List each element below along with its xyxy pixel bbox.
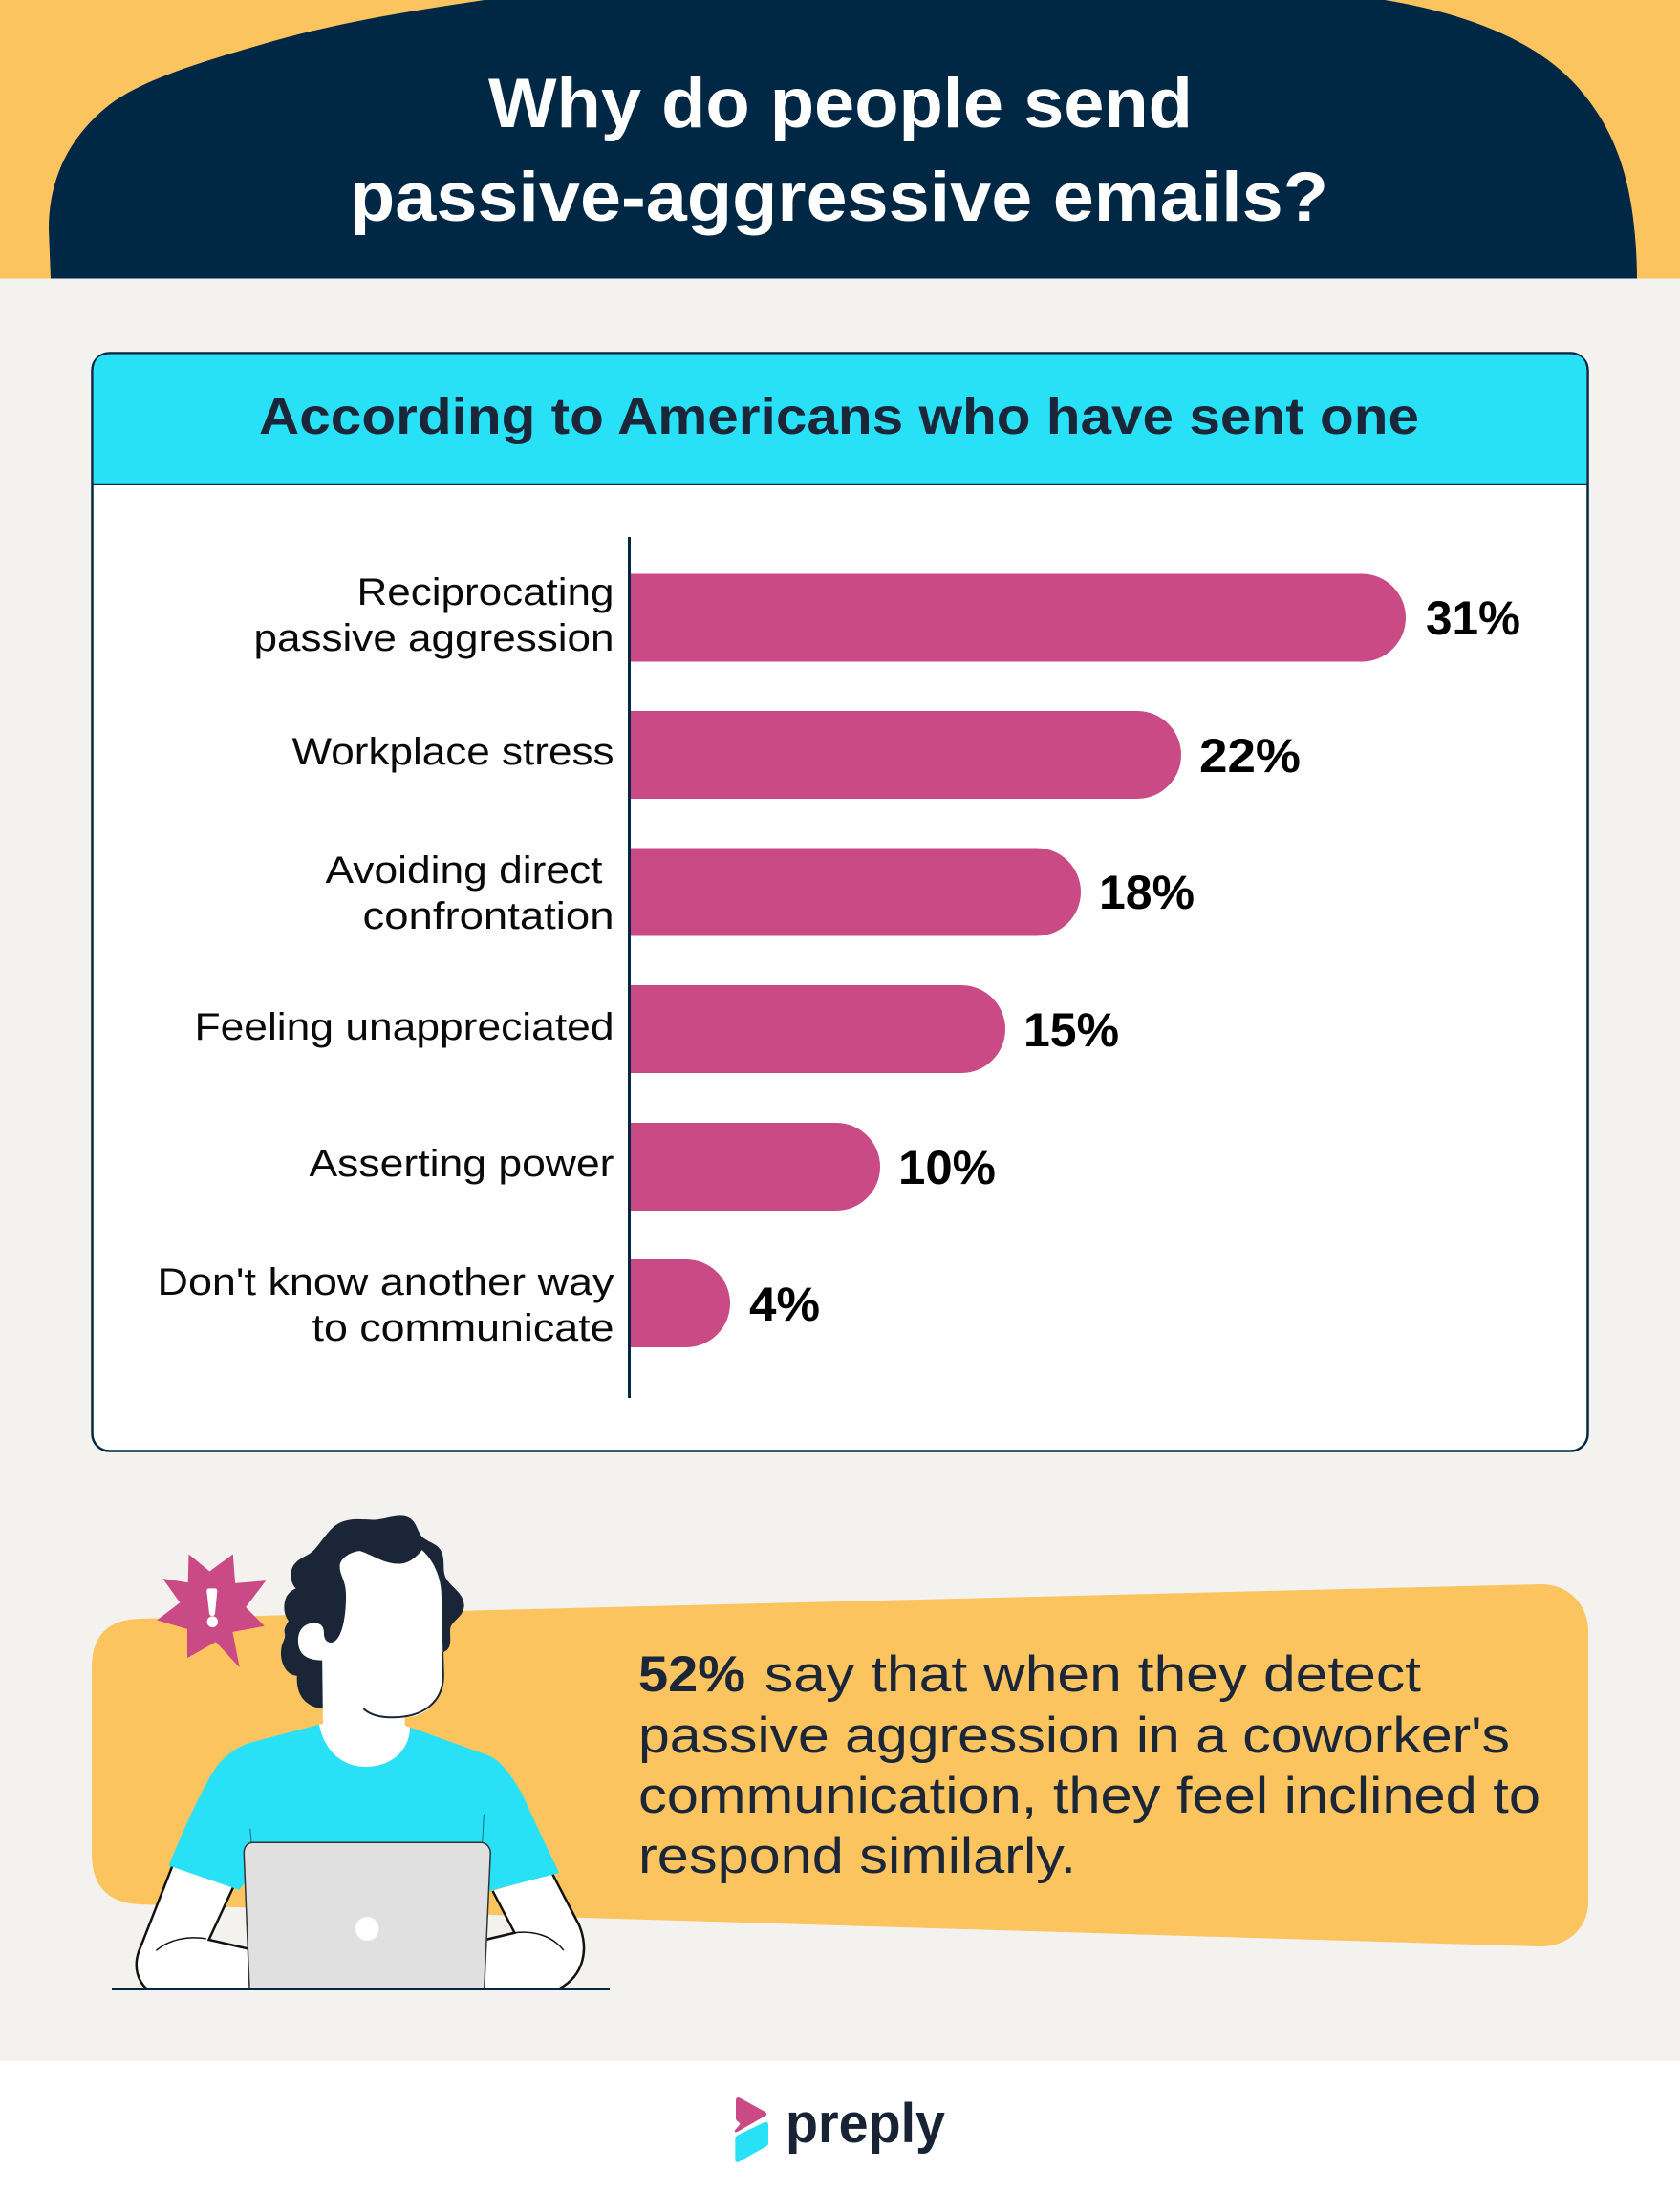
chart axis [628,537,631,1398]
bar: reciprocating passive aggression 31%: passive aggression [254,617,614,659]
shirt fold lines [250,1815,484,1842]
logo mark [735,2097,768,2162]
icon: alert burst [157,1555,266,1667]
bar: don't know another way to communicate 4%: Don't know another way [157,1261,614,1303]
panel: survey chart card [92,354,1588,1451]
person t-shirt [168,1725,559,1891]
card header divider [92,484,1588,485]
bar: avoiding direct confrontation 18% [325,849,1195,937]
bar: asserting power 10%: Asserting power [310,1143,614,1185]
footer white band [0,2061,1680,2192]
bar: feeling unappreciated 15%: 15% [1023,1003,1119,1057]
bar: avoiding direct confrontation 18%: Avoiding direct [325,849,602,892]
callout text: 52% [638,1646,745,1703]
logo wordmark: preply [786,2093,945,2155]
preply logo [735,2093,945,2162]
footer [0,2061,1680,2192]
illustration: person at laptop [137,1515,584,1988]
title [350,65,1328,236]
bar: feeling unappreciated 15%: Feeling unappreciated [195,1006,614,1048]
bar: workplace stress 22%: Workplace stress [292,731,614,773]
person left arm [137,1866,249,1988]
header yellow background [0,0,1680,279]
bar: workplace stress 22% [292,711,1301,799]
card header band [94,355,1586,484]
callout panel [92,1584,1588,1946]
bar: asserting power 10% [310,1123,996,1211]
bar: workplace stress 22%: 22% [1199,729,1301,783]
person hair [281,1515,464,1708]
bar: reciprocating passive aggression 31%: 31% [1426,591,1520,645]
bar: reciprocating passive aggression 31%: Reciprocating [357,571,614,613]
bar: asserting power 10%: 10% [898,1141,996,1194]
bar: feeling unappreciated 15% [195,985,1119,1073]
bar: don't know another way to communicate 4%: 4% [749,1278,820,1331]
callout text: communication, they feel inclined to [638,1768,1540,1824]
header banner [0,0,1680,279]
desk line [112,1988,610,1990]
bar: don't know another way to communicate 4% [157,1259,820,1349]
jaw line [363,1652,443,1717]
laptop [244,1842,490,1988]
card heading: According to Americans who have sent one [259,388,1419,445]
callout text: say that when they detect [765,1646,1421,1703]
arm outlines [137,1866,584,1988]
title: passive-aggressive emails? [350,159,1328,236]
person right arm [485,1873,584,1988]
person face and neck [298,1550,443,1767]
callout text [638,1646,1540,1884]
card body [92,354,1588,1451]
bar: reciprocating passive aggression 31% [254,571,1520,661]
callout text: respond similarly. [638,1828,1076,1884]
bar: don't know another way to communicate 4%: to communicate [312,1307,614,1349]
header navy blob [49,0,1637,279]
bar chart [157,537,1520,1398]
callout text: passive aggression in a coworker's [638,1708,1510,1764]
bar: avoiding direct confrontation 18%: 18% [1099,866,1195,919]
bar: avoiding direct confrontation 18%: confrontation [363,895,614,937]
title: Why do people send [488,65,1193,142]
callout yellow shape [92,1584,1588,1946]
